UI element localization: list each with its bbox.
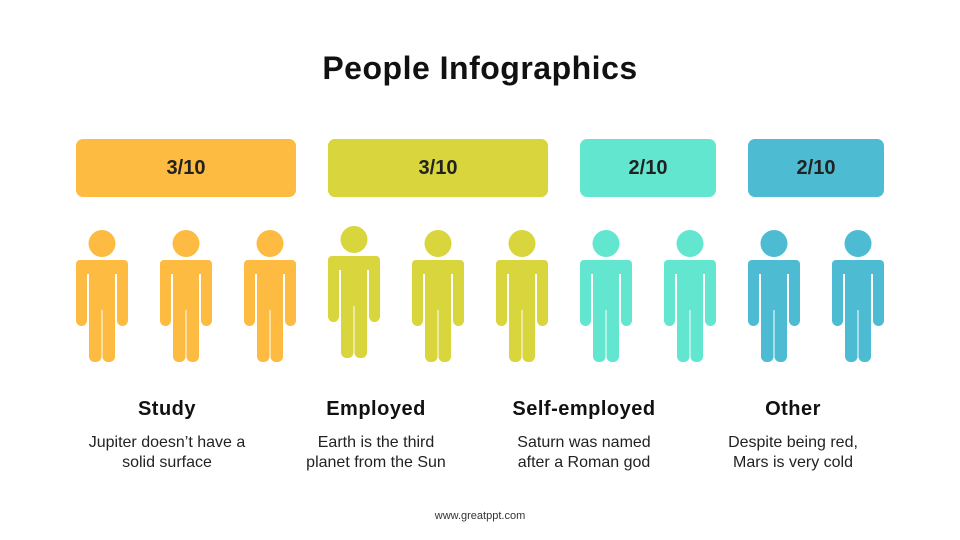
desc: study [89,434,246,471]
box: employed 3/10: 3/10 [419,156,457,178]
footer: www.greatppt.com [435,510,525,522]
box: employed 3/10 [328,139,548,197]
desc: other: Despite being red, [728,434,858,451]
figures: other [748,230,884,362]
box: study 3/10: 3/10 [167,156,205,178]
desc: employed [306,434,446,471]
box: self-employed 2/10 [580,139,716,197]
desc: self-employed: Saturn was named [517,434,651,451]
box: self-employed 2/10: 2/10 [629,156,667,178]
box: other 2/10 [748,139,884,197]
label: self-employed: Self-employed [512,398,656,420]
desc: self-employed [517,434,651,471]
label: other: Other [765,398,821,420]
desc: study: solid surface [122,454,212,471]
desc: other [728,434,858,471]
figures: study [76,230,296,362]
label: study: Study [138,398,196,420]
desc: employed: Earth is the third [318,434,434,451]
desc: study: Jupiter doesn’t have a [89,434,245,451]
desc: other: Mars is very cold [733,454,853,471]
desc: self-employed: after a Roman god [518,454,650,471]
figures: self-employed [580,230,716,362]
desc: employed: planet from the Sun [306,454,446,471]
label: employed: Employed [326,398,426,420]
box: other 2/10: 2/10 [797,156,835,178]
box: study 3/10 [76,139,296,197]
title: People Infographics [322,50,638,86]
figures: employed [328,226,548,362]
